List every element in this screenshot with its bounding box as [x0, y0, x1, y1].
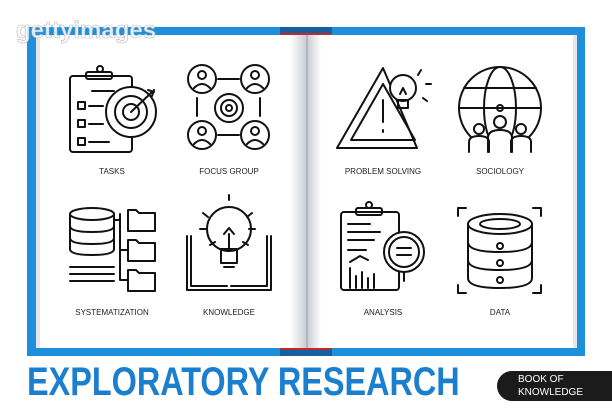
icon: focus group [188, 65, 269, 149]
badge: book of knowledge [497, 371, 612, 401]
icon: data [458, 208, 541, 293]
icon labels [75, 167, 525, 317]
icon labels: DATA [490, 308, 511, 317]
icon: knowledge [187, 195, 271, 290]
icon labels: SOCIOLOGY [476, 167, 525, 176]
title: EXPLORATORY RESEARCH [27, 360, 460, 404]
badge: book of knowledge: KNOWLEDGE [518, 387, 583, 398]
icon labels: ANALYSIS [364, 308, 402, 317]
icon: problem solving [337, 68, 431, 148]
badge: book of knowledge: BOOK OF [518, 374, 564, 385]
icon labels: PROBLEM SOLVING [345, 167, 421, 176]
icon: systematization [70, 208, 155, 291]
icon labels: TASKS [99, 167, 125, 176]
icon labels: SYSTEMATIZATION [75, 308, 149, 317]
watermark: gettyimages [16, 17, 156, 44]
icon: analysis [341, 202, 424, 290]
icon labels: KNOWLEDGE [203, 308, 255, 317]
icon labels: FOCUS GROUP [199, 167, 259, 176]
pages [36, 35, 577, 348]
book cover [27, 27, 585, 356]
icon: sociology [459, 67, 541, 152]
icon: tasks [70, 66, 156, 152]
